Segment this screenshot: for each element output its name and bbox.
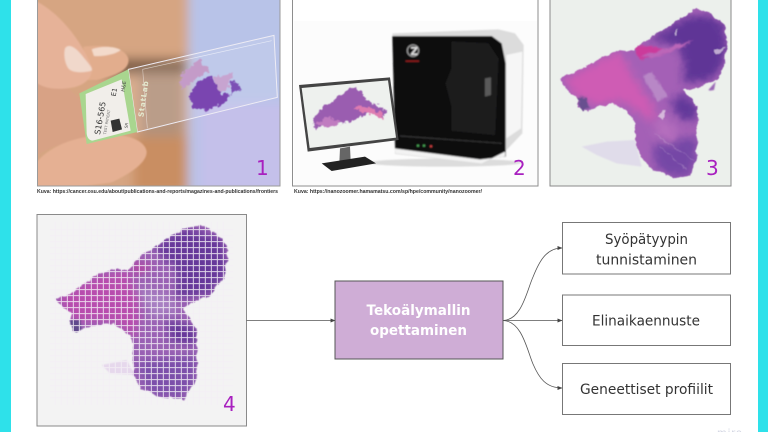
scanner: Z	[410, 45, 418, 58]
left cyan border	[0, 0, 11, 432]
panel 1: photo of a hand holding a glass slide	[38, 0, 280, 186]
box: cancer type identification: tunnistaminen	[596, 252, 697, 268]
box: genetic profiles: Geneettiset profiilit	[580, 382, 713, 398]
box: genetic profiles	[562, 364, 730, 414]
arrow: to cancer type identification	[503, 248, 562, 320]
monitor	[299, 77, 399, 171]
panel 2: slide scanner and monitor	[292, 0, 538, 186]
box: model training	[335, 281, 503, 359]
arrow: tiles to model training	[246, 320, 335, 322]
glass slide	[128, 35, 277, 132]
box: model training: opettaminen	[370, 323, 467, 339]
fingers	[33, 0, 147, 190]
box: cancer type identification	[562, 222, 730, 274]
step number 3: 3	[706, 156, 719, 180]
slide label: H&E	[120, 81, 128, 92]
box: model training: Tekoälymallin	[366, 303, 470, 319]
panel 3 frame	[550, 0, 731, 186]
panel 3: stained tissue scan	[550, 0, 733, 186]
slide label: TEST PATIENT	[103, 109, 111, 136]
slide label: E1	[110, 87, 119, 97]
right cyan border	[758, 0, 768, 432]
caption 1: Kuva: https://cancer.osu.edu/about/publications-and-reports/magazines-and-publications/frontiers	[37, 189, 278, 195]
step number 1: 1	[256, 156, 269, 180]
box: survival prediction	[562, 295, 730, 346]
slide label: StatLab	[136, 80, 150, 118]
caption 2: Kuva: https://nanozoomer.hamamatsu.com/sp/hpe/community/nanozoomer/	[294, 189, 482, 195]
slide label: SR	[123, 122, 129, 129]
tissue on slide	[180, 59, 242, 110]
box: survival prediction: Elinaikaennuste	[592, 314, 700, 330]
scanner	[368, 29, 524, 167]
slide label	[79, 69, 150, 144]
slide label: S16-565	[93, 101, 108, 135]
arrow: to genetic profiles	[503, 320, 562, 388]
panel 4: tissue split into a grid of tiles	[37, 214, 246, 426]
blurred background	[104, 0, 280, 186]
panel 1 frame	[38, 0, 280, 186]
arrow: to survival prediction	[503, 320, 562, 322]
box: cancer type identification: Syöpätyypin	[605, 232, 688, 248]
step number 2: 2	[513, 156, 526, 180]
step number 4: 4	[223, 392, 236, 416]
white grid lines	[50, 222, 233, 405]
